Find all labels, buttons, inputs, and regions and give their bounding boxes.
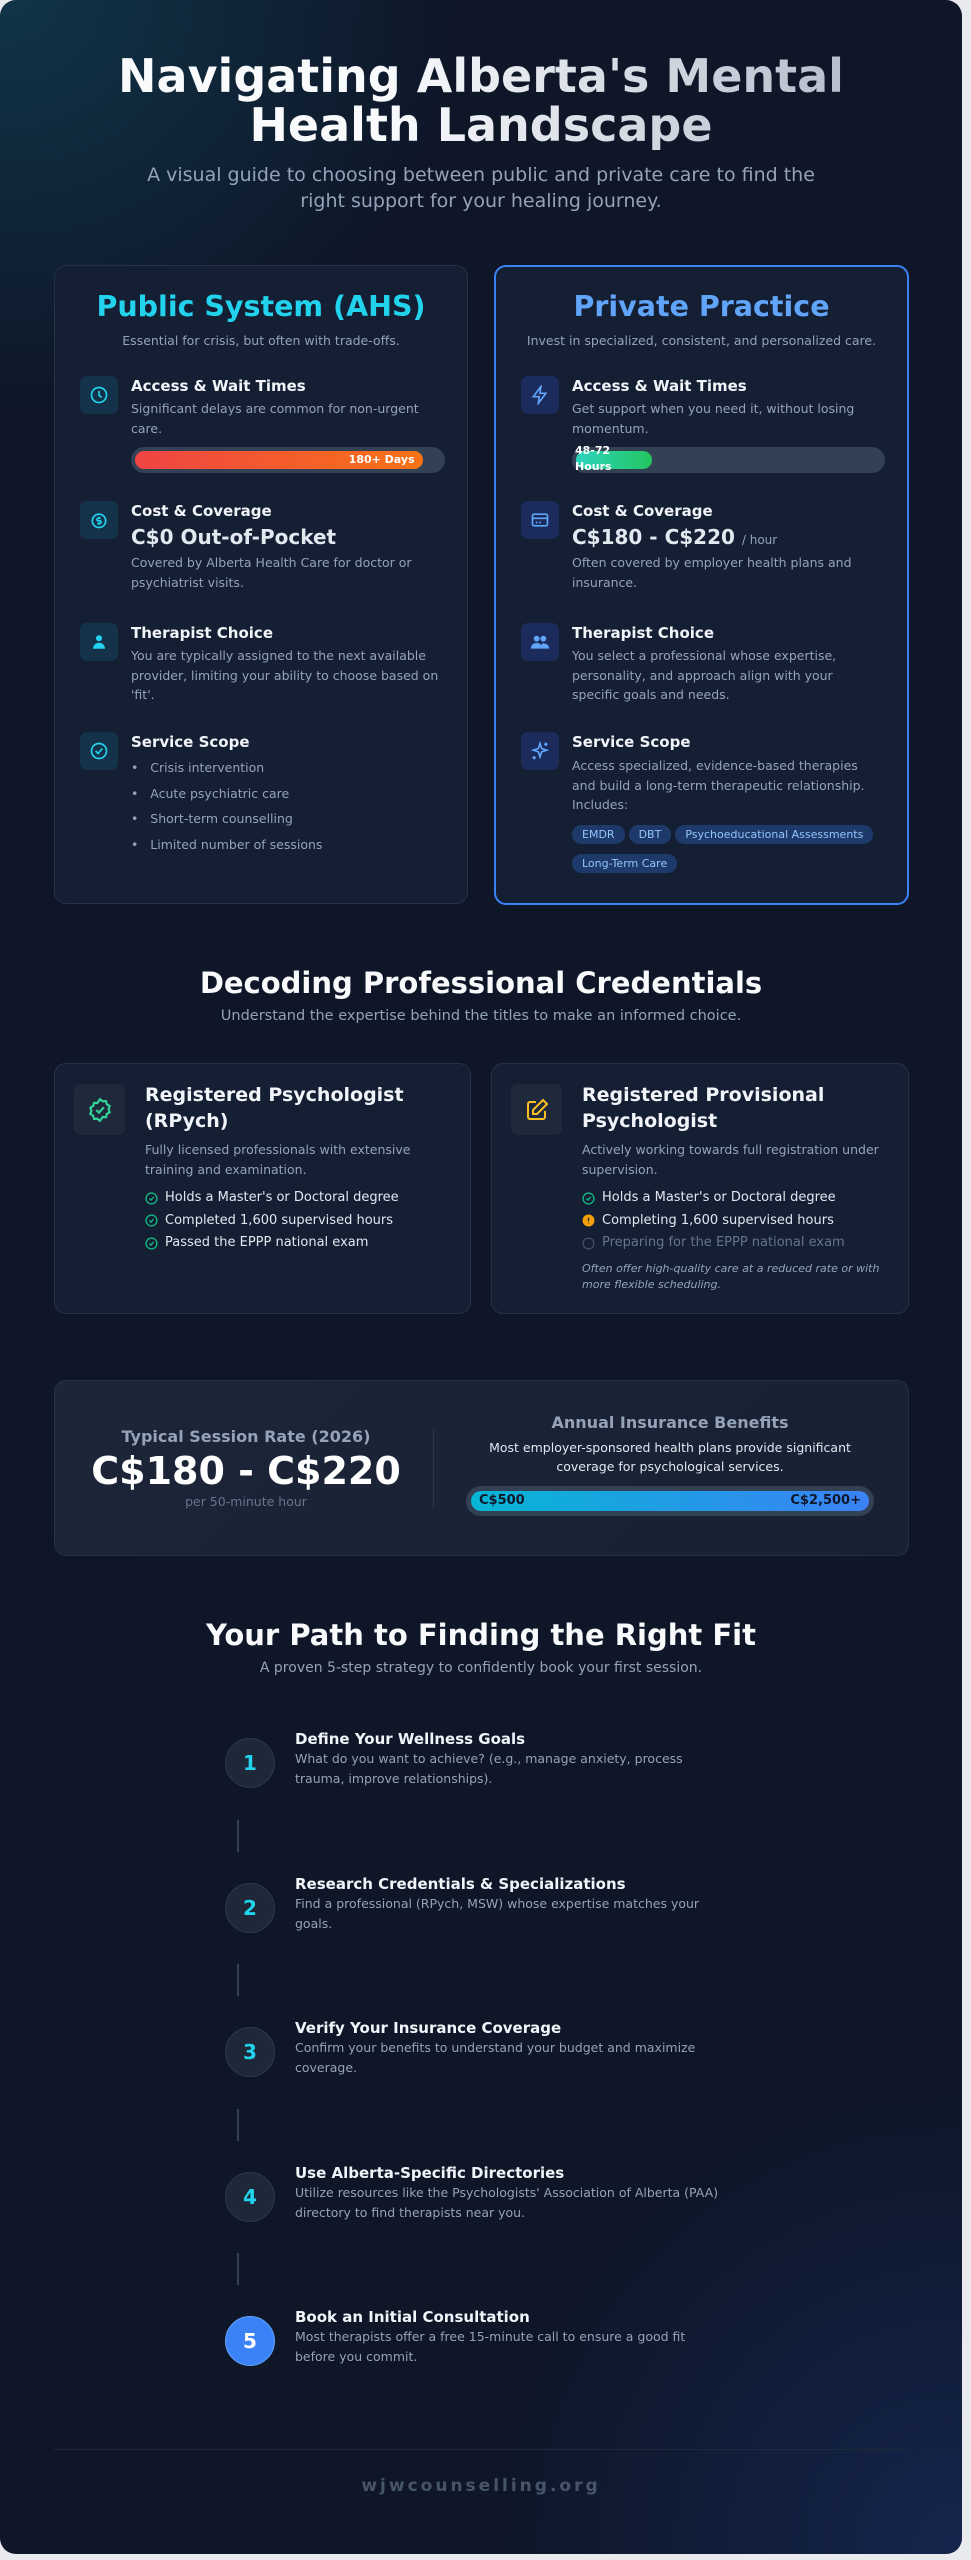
step 2: Research Credentials & Specializations [295,1875,626,1893]
session rate: C$180 - C$220 [91,1449,401,1493]
item: scope: • Short-term counselling [131,811,293,826]
step 4: 4 [243,2185,257,2209]
item: scope: Psychoeducational Assessments [685,828,863,840]
item: scope: Service Scope [572,733,690,751]
checklist: Completing 1,600 supervised hours [602,1212,834,1228]
item: access: Significant delays are common for non-urgent care. [131,401,419,436]
item: access [131,377,445,473]
item: cost: Covered by Alberta Health Care for doctor or psychiatrist visits. [131,555,412,590]
step 5: Most therapists offer a free 15-minute call to ensure a good fit [295,2329,685,2344]
checklist: Completed 1,600 supervised hours [165,1212,393,1228]
subheading: path: A proven 5-step strategy to confidently book your first session. [260,1660,702,1676]
checklist: Preparing for the EPPP national exam [602,1235,845,1250]
item: cost: C$0 Out-of-Pocket [131,525,336,549]
title [0,52,962,150]
icon: clock [80,376,118,414]
card title: Registered Psychologist (RPych) [145,1084,404,1132]
step 5: 5 [243,2329,257,2353]
insurance bar: C$500 [479,1493,525,1508]
checklist: Holds a Master's or Doctoral degree [602,1190,836,1205]
step 5: Book an Initial Consultation [295,2308,530,2326]
item: scope: • Limited number of sessions [131,837,322,852]
subheading: credentials: Understand the expertise behind the titles to make an informed choice. [221,1008,741,1024]
item: access: Get support when you need it, without losing momentum. [572,401,854,436]
item: cost: Often covered by employer health plans and insurance. [572,555,852,590]
subtitle [147,164,815,212]
item: cost [131,502,412,590]
icon: person [80,623,118,661]
checklist [582,1190,845,1250]
card: provisional psychologist [491,1063,909,1314]
icon: card [521,501,559,539]
step 4: Use Alberta-Specific Directories [295,2164,564,2182]
item: scope: Access specialized, evidence-based therapies and build a long-term therapeutic relationship. Includes: [572,758,865,812]
insurance benefits: Most employer-sponsored health plans provide significant [489,1440,851,1455]
step 4 [225,2164,718,2222]
step 2 [225,1875,699,1933]
item: choice: You are typically assigned to the next available provider, limiting your ability to choose based on 'fit'. [131,648,438,702]
insurance benefits: Annual Insurance Benefits [552,1413,788,1432]
checklist: Holds a Master's or Doctoral degree [165,1190,399,1205]
item: access [572,377,885,473]
heading: path: Your Path to Finding the Right Fit [206,1618,756,1652]
item: access: 48-72 [575,444,610,457]
checklist: Passed the EPPP national exam [165,1235,368,1250]
panel: rates and insurance [54,1380,909,1556]
item: cost [572,502,852,590]
icon: badge check [74,1084,125,1135]
item: choice: Therapist Choice [131,624,273,642]
item: scope: Service Scope [131,733,250,751]
panel subheading: Invest in specialized, consistent, and personalized care. [527,333,876,348]
icon: bolt [521,376,559,414]
heading: credentials: Decoding Professional Credentials [200,966,762,1000]
item: scope [131,733,322,852]
item: choice: Therapist Choice [572,624,714,642]
step 5 [225,2308,685,2366]
title: Health Landscape [249,98,713,152]
item: scope: • Crisis intervention [131,760,264,775]
step 3: Verify Your Insurance Coverage [295,2019,561,2037]
item: scope: DBT [639,828,661,840]
card title: Registered Provisional Psychologist [582,1084,824,1132]
checklist [145,1190,399,1250]
card: registered psychologist [54,1063,471,1314]
panel heading: private: Private Practice [573,290,830,323]
item: scope: EMDR [582,828,615,840]
footer: wjwcounselling.org [361,2476,601,2496]
item: choice: You select a professional whose expertise, personality, and approach align with your specific goals and needs. [572,648,836,702]
item: choice [131,624,438,702]
panel heading: public: Public System (AHS) [96,290,426,323]
step 5: before you commit. [295,2348,417,2364]
session rate: per 50-minute hour [185,1494,307,1509]
item: access: Access & Wait Times [572,377,747,395]
item: cost: Cost & Coverage [131,502,272,520]
item: cost: C$180 - C$220 / hour [572,525,777,549]
card description: Actively working towards full registration under supervision. [582,1142,879,1176]
item: scope: Long-Term Care [582,856,667,870]
step 1: Define Your Wellness Goals [295,1730,525,1748]
item: scope [572,733,873,873]
card description: Fully licensed professionals with extensive training and examination. [145,1142,410,1176]
step 2: 2 [243,1896,257,1920]
icon: coin [80,501,118,539]
item: choice [572,624,836,702]
session rate [91,1427,401,1509]
step 1: 1 [243,1751,257,1775]
icon: check [80,732,118,770]
step 3: Confirm your benefits to understand your budget and maximize [295,2040,695,2055]
insurance benefits: coverage for psychological services. [556,1459,784,1474]
item: access: Access & Wait Times [131,377,306,395]
session rate: Typical Session Rate (2026) [122,1427,370,1446]
icon: sparkle [521,732,559,770]
step 1: trauma, improve relationships). [295,1770,492,1786]
insurance bar [466,1486,874,1516]
subtitle: A visual guide to choosing between public and private care to find the [147,164,815,186]
step 1: What do you want to achieve? (e.g., manage anxiety, process [295,1751,683,1766]
insurance bar: C$2,500+ [790,1493,861,1508]
step 3 [225,2019,695,2077]
title: Navigating Alberta's Mental [118,49,844,103]
item: cost: Cost & Coverage [572,502,713,520]
step 4: Utilize resources like the Psychologists' Association of Alberta (PAA) [295,2185,718,2200]
insurance benefits [466,1413,874,1516]
step 4: directory to find therapists near you. [295,2204,525,2220]
step 3: coverage. [295,2060,357,2074]
subtitle: right support for your healing journey. [300,190,662,212]
step 2: Find a professional (RPych, MSW) whose expertise matches your [295,1896,699,1911]
panel: public system [54,265,468,904]
panel subheading: Essential for crisis, but often with trade-offs. [122,333,400,348]
step 3: 3 [243,2040,257,2064]
step 2: goals. [295,1916,332,1930]
panel: private practice [494,265,909,905]
item: access: 180+ Days [349,453,415,466]
step 1 [225,1730,683,1788]
icon: people [521,623,559,661]
note: Often offer high-quality care at a reduced rate or with more flexible scheduling. [582,1262,879,1290]
icon: edit [511,1084,562,1135]
item: access: Hours [575,460,612,473]
item: scope: • Acute psychiatric care [131,786,289,801]
